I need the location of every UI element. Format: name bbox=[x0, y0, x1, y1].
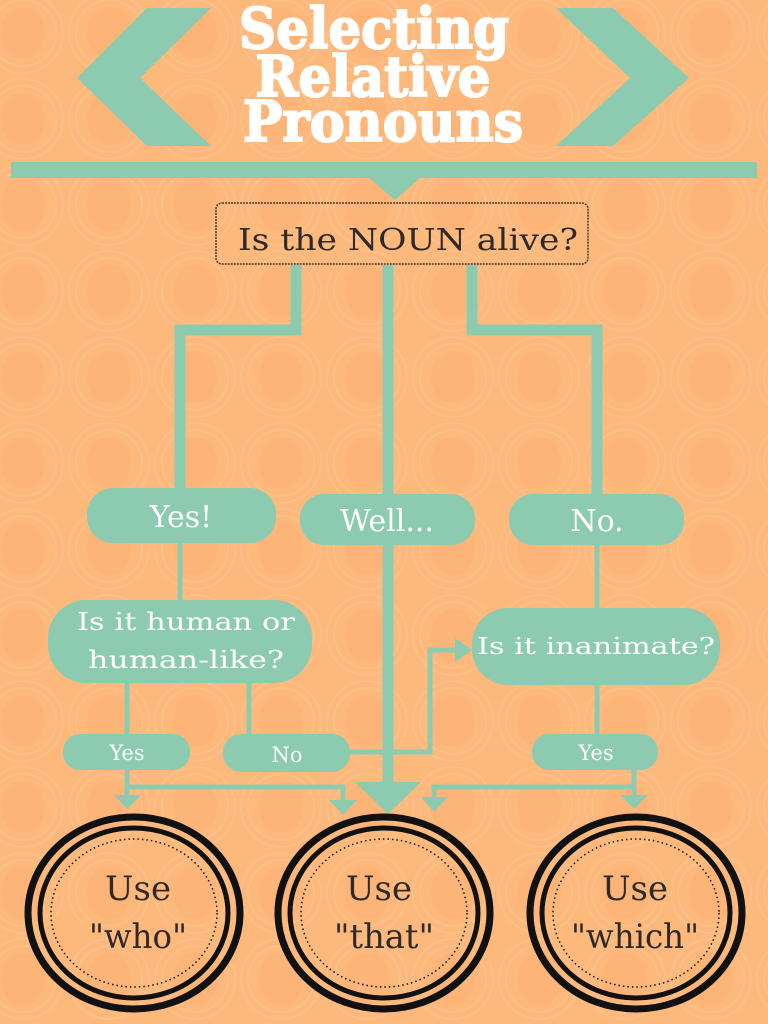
blob: No.: No. bbox=[570, 504, 624, 539]
result: which bbox=[530, 817, 742, 1009]
small blob: Yes (right) bbox=[532, 734, 658, 770]
result: which: "which" bbox=[571, 917, 699, 957]
result: who: Use bbox=[105, 869, 171, 909]
result: that bbox=[278, 817, 490, 1009]
blob: No. bbox=[509, 494, 684, 545]
title: Pronouns bbox=[243, 89, 523, 155]
question box: Is the NOUN alive? bbox=[238, 223, 578, 258]
blob: Yes! bbox=[87, 488, 276, 543]
question box bbox=[216, 203, 588, 264]
blob: Well... bbox=[300, 494, 475, 545]
arrowheads bbox=[114, 638, 648, 815]
result: which: Use bbox=[602, 869, 668, 909]
blob: human question: human-like? bbox=[88, 646, 284, 674]
small blob: Yes (right): Yes bbox=[577, 741, 614, 765]
header bar bbox=[11, 162, 757, 200]
blob: inanimate question: Is it inanimate? bbox=[477, 634, 715, 660]
blob: human question bbox=[48, 600, 312, 683]
result: who: "who" bbox=[89, 917, 187, 957]
small blob: No bbox=[223, 734, 350, 772]
blob: Yes!: Yes! bbox=[149, 500, 212, 535]
title bbox=[239, 0, 523, 155]
result: that: Use bbox=[346, 869, 412, 909]
blob: human question: Is it human or bbox=[77, 608, 296, 636]
small blob: Yes (left): Yes bbox=[108, 741, 145, 765]
small blob: No: No bbox=[271, 743, 303, 767]
connectors bbox=[127, 265, 634, 803]
result: who bbox=[28, 817, 240, 1009]
chevron right bbox=[556, 8, 689, 146]
chevron left bbox=[77, 8, 211, 146]
blob: inanimate question bbox=[472, 608, 720, 685]
small blob: Yes (left) bbox=[63, 734, 190, 770]
title: Relative bbox=[256, 44, 490, 110]
result: that: "that" bbox=[334, 917, 434, 957]
blob: Well...: Well... bbox=[340, 504, 434, 539]
